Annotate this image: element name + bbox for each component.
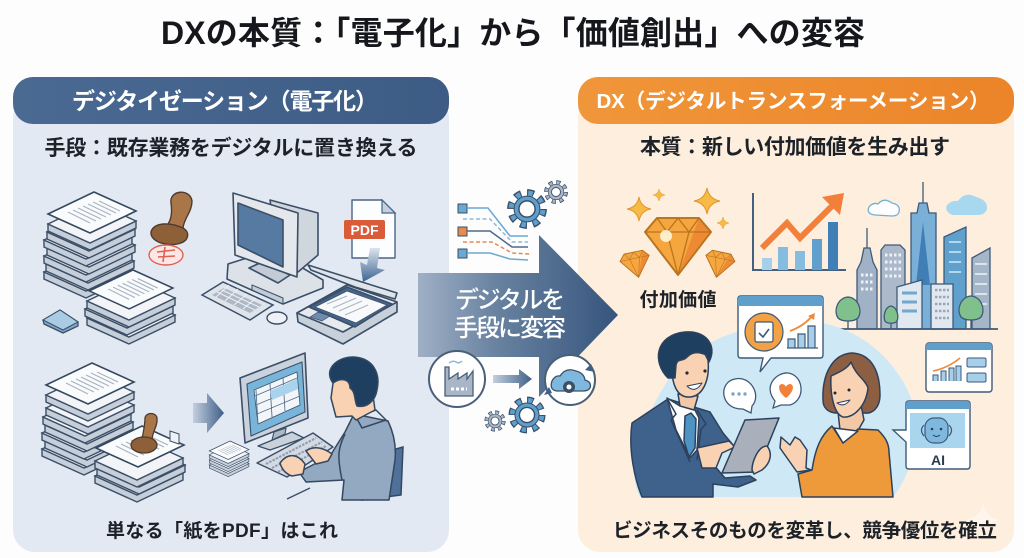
arrow label: デジタルを — [455, 286, 565, 314]
icon: paper stack small — [85, 270, 175, 344]
icon: speech bubble heart — [770, 373, 801, 408]
callout: calendar and chart window — [738, 296, 823, 372]
arrow label — [454, 286, 566, 342]
icon: PDF document: PDF — [350, 222, 379, 238]
icon: mouse — [267, 312, 287, 324]
panel background — [13, 96, 449, 552]
subheading: 本質：新しい付加価値を生み出す — [640, 136, 950, 159]
arrow: paper to digital — [193, 393, 224, 433]
icon: eraser — [43, 310, 78, 333]
icon: small paper stack — [209, 441, 249, 477]
panel header: DX（デジタルトランスフォーメーション） — [596, 89, 990, 113]
callout: AI window: AI — [931, 452, 945, 468]
icon: chair — [362, 447, 403, 500]
icon: hanko stamp — [149, 192, 192, 265]
arrow: factory to cloud — [493, 369, 532, 389]
icon: cityscape — [836, 182, 998, 329]
callout: AI window — [893, 401, 970, 469]
icon: gear large bottom — [513, 401, 541, 429]
icon: trees — [836, 296, 983, 329]
icon: businessman — [631, 332, 779, 497]
caption: 単なる「紙をPDF」はこれ — [106, 520, 338, 542]
panel background — [578, 96, 1014, 552]
icon: PDF document — [344, 200, 395, 282]
icon: paper stack lower — [42, 363, 134, 475]
icon: cloud circle — [544, 355, 595, 405]
icon: desk line — [287, 488, 310, 499]
icon: scanner — [297, 265, 397, 344]
panel header — [13, 77, 449, 124]
icon: gear small bottom — [487, 413, 503, 429]
icon: light blue backdrop — [634, 321, 916, 497]
icon: speech bubble dots — [724, 378, 756, 413]
icon: keyboard — [202, 282, 273, 320]
icon: data flow lines — [458, 204, 530, 260]
icon: desktop computer — [227, 193, 323, 304]
caption: ビジネスそのものを変革し、競争優位を確立 — [613, 519, 997, 542]
panel header — [578, 77, 1014, 124]
icon: watermark sparkle — [966, 502, 1000, 538]
panel header: デジタイゼーション（電子化） — [72, 88, 378, 114]
subheading: 手段：既存業務をデジタルに置き換える — [44, 136, 418, 160]
icon: office worker — [280, 357, 395, 500]
label: added value: 付加価値 — [640, 289, 716, 311]
arrow: large transition — [418, 235, 618, 397]
callout: dashboard window — [926, 343, 992, 392]
icon: paper stack large — [44, 192, 136, 298]
icon: businesswoman — [780, 353, 893, 497]
chart: growth bars — [753, 193, 846, 270]
icon: gear small top — [547, 183, 565, 201]
central transition — [418, 183, 618, 429]
icon: office keyboard — [257, 433, 333, 477]
title: DXの本質：「電子化」から「価値創出」への変容 — [161, 15, 865, 51]
arrow label: 手段に変容 — [454, 315, 566, 342]
panel: digitization — [13, 77, 449, 552]
icon: office monitor — [240, 353, 308, 450]
icon: factory circle — [429, 351, 485, 407]
icon: gear large top — [512, 194, 542, 224]
icon: gems and sparkles — [619, 188, 736, 280]
icon: clouds — [868, 195, 987, 216]
panel: digital transformation — [578, 77, 1014, 552]
icon: stamped paper stack — [95, 414, 185, 502]
